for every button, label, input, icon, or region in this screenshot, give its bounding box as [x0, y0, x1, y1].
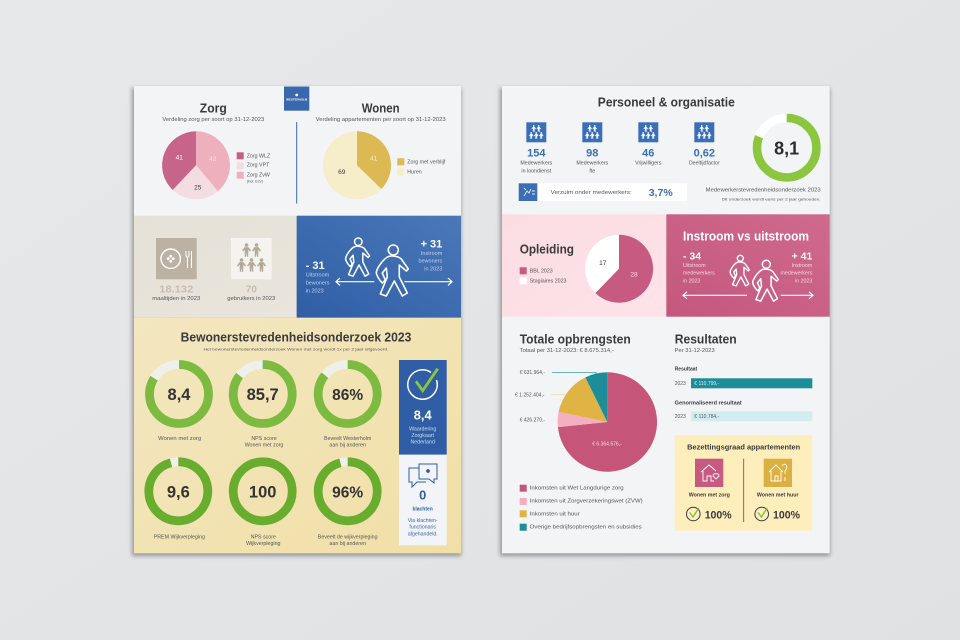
stat: instroom bewoners: [418, 238, 443, 272]
card: bezettingsgraad: Wonen met huur: [757, 492, 799, 498]
ring: beveelt westerholm: Beveelt Westerholm: [324, 436, 372, 442]
stat: instroom bewoners: in 2023: [424, 266, 442, 272]
pie chart: opbrengsten: € 1.252.404,-: [515, 393, 545, 399]
stat: medewerkers fte: [576, 122, 609, 175]
stat: uitstroom medewerkers: [683, 250, 715, 284]
stat: instroom medewerkers: + 41: [792, 250, 812, 262]
panel: resultaten: [675, 331, 812, 531]
caption: medewerkerstevredenheid: Dit onderzoek wordt eens per 2 jaar gehouden.: [722, 196, 821, 201]
ring: medewerkerstevredenheid: [757, 118, 816, 177]
stat: instroom bewoners: Instroom: [421, 251, 443, 257]
bar: verzuim: [519, 183, 687, 201]
card: klachten: klachten: [413, 507, 433, 513]
card: waardering zorgkaart: Waardering: [409, 426, 436, 432]
ring: beveelt wijkverpleging: Beveelt de wijkverpleging: [318, 534, 378, 540]
stat: medewerkers fte: fte: [589, 169, 595, 175]
pie chart: opbrengsten: € 6.364.676,-: [592, 441, 622, 447]
arrow: uitstroom: [683, 292, 747, 299]
pie chart: wonen: [323, 131, 391, 199]
panel: totale opbrengsten: [515, 331, 657, 531]
stat: uitstroom bewoners: [306, 260, 330, 294]
stat: uitstroom medewerkers: Uitstroom: [683, 263, 706, 269]
heading: zorg: Zorg: [200, 100, 227, 115]
legend: zorg: Zorg WLZ: [247, 153, 271, 159]
pie chart: opbrengsten: € 631.964,-: [520, 370, 545, 376]
legend: opleiding: BBL 2023: [530, 268, 553, 274]
heading: personeel: Personeel & organisatie: [598, 95, 735, 110]
right page: [500, 86, 830, 556]
ring: medewerkerstevredenheid: 8,1: [774, 139, 799, 159]
stat: uitstroom bewoners: in 2023: [306, 288, 324, 294]
pie chart: opleiding: 17: [599, 260, 607, 267]
ring: prem wijkverpleging: PREM Wijkverpleging: [154, 534, 205, 540]
ring: wonen met zorg: [150, 364, 208, 442]
ring: nps wijkverpleging: 100: [249, 483, 276, 501]
pie chart: opbrengsten: € 426.270,-: [520, 417, 545, 423]
legend: opbrengsten: Inkomsten uit Wet Langdurige zorg: [530, 485, 624, 491]
stat: instroom medewerkers: [781, 250, 813, 284]
subtitle: wonen: Verdeling appartementen per soort op 31-12-2023: [316, 117, 446, 123]
stat: uitstroom medewerkers: - 34: [683, 250, 701, 262]
stat: instroom medewerkers: in 2023: [795, 278, 812, 284]
subtitle: totale opbrengsten: Totaal per 31-12-2023: € 8.675.314,-: [520, 348, 614, 354]
bar: genormaliseerd resultaat: [675, 400, 812, 421]
panel: personeel en organisatie: [519, 95, 821, 201]
pie chart: opbrengsten: [515, 370, 657, 472]
stat: deeltijdfactor: [689, 122, 720, 166]
ring: nps wonen met zorg: NPS score: [251, 436, 277, 442]
stat: instroom bewoners: bewoners: [418, 259, 443, 265]
caption: medewerkerstevredenheid: [706, 187, 821, 201]
ring: beveelt westerholm: 86%: [332, 387, 363, 404]
value: gebruikers: 70: [246, 284, 257, 295]
legend: wonen: Zorg met verblijf: [407, 159, 446, 165]
value: maaltijden: 18.132: [159, 284, 194, 295]
icon: wonen met huur: [764, 459, 792, 487]
stat: bezetting wonen met zorg: 100%: [705, 510, 732, 522]
bar: resultaat: € 110.799,-: [694, 381, 720, 387]
panel: instroom vs uitstroom: [666, 214, 830, 317]
legend: zorg: Zorg ZvW: [247, 172, 270, 178]
card: waardering zorgkaart: [399, 360, 447, 455]
legend: zorg: Zorg VPT: [247, 163, 270, 169]
ring: beveelt wijkverpleging: 96%: [332, 484, 363, 501]
legend: opbrengsten: Inkomsten uit huur: [530, 511, 580, 517]
legend: zorg: [237, 152, 271, 183]
ring: prem wijkverpleging: [149, 462, 208, 540]
legend: wonen: Huren: [407, 169, 422, 175]
bar: resultaat: Resultaat: [675, 367, 698, 373]
legend: wonen: [397, 158, 446, 175]
stat: uitstroom bewoners: bewoners: [306, 280, 330, 286]
stat: uitstroom medewerkers: medewerkers: [683, 271, 715, 277]
ring: wonen met zorg: Wonen met zorg: [158, 436, 201, 442]
stat: uitstroom bewoners: - 31: [306, 260, 325, 272]
subtitle: bewonerstevredenheid: Het bewonerstevredenheidsonderzoek Wonen met zorg wordt 1x per 2 jaar uitgevoerd.: [204, 346, 388, 351]
legend: opbrengsten: Inkomsten uit Zorgverzekeringswet (ZVW): [530, 498, 643, 504]
card: klachten: functionaris: [409, 525, 436, 531]
card: bezettingsgraad: Wonen met zorg: [689, 492, 730, 498]
arrow: instroom: [781, 292, 813, 299]
subtitle: zorg: Verdeling zorg per soort op 31-12-2023: [162, 117, 264, 123]
ring: prem wijkverpleging: 9,6: [167, 483, 190, 501]
bar: resultaat: [675, 367, 812, 388]
stat: medewerkers fte: Medewerkers: [576, 160, 609, 166]
card: waardering zorgkaart: Nederland: [410, 440, 435, 446]
stat: medewerkers loondienst: 154: [527, 148, 546, 160]
heading: resultaten: Resultaten: [675, 331, 737, 346]
panel: bewonerstevredenheidsonderzoek: [134, 318, 461, 553]
stat: vrijwilligers: Vrijwilligers: [635, 160, 662, 166]
heading: opleiding: Opleiding: [520, 242, 574, 256]
pie chart: wonen: 41: [370, 156, 378, 163]
pie chart: opleiding: 28: [630, 271, 638, 278]
logo: WESTERHOLM: [286, 98, 308, 102]
caption: medewerkerstevredenheid: Medewerkerstevredenheidsonderzoek 2023: [706, 187, 821, 193]
panel: zorg: [162, 100, 271, 199]
panel: instroom uitstroom bewoners: [297, 216, 461, 318]
stat: medewerkers fte: 98: [586, 148, 598, 160]
ring: nps wonen met zorg: [233, 364, 292, 449]
label: gebruikers: gebruikers in 2023: [227, 296, 275, 302]
ring: beveelt westerholm: aan bij anderen: [329, 443, 366, 449]
card: waardering zorgkaart: Zorgkaart: [411, 433, 435, 439]
stat: uitstroom medewerkers: in 2023: [683, 278, 700, 284]
stat: bezetting wonen met huur: 100%: [773, 510, 800, 522]
bar: genormaliseerd resultaat: € 110.784,-: [694, 414, 720, 420]
ring: beveelt wijkverpleging: aan bij anderen: [329, 541, 366, 547]
pie chart: opleiding: [585, 235, 653, 303]
pie chart: zorg: 25: [194, 184, 202, 191]
arrow: instroom: [404, 278, 452, 285]
card: klachten: [399, 455, 447, 545]
icon: walkers: [346, 238, 408, 296]
bar: genormaliseerd resultaat: Genormaliseerd resultaat: [675, 400, 742, 406]
ring: nps wonen met zorg: 85,7: [247, 386, 279, 404]
icon: walkers: [730, 255, 778, 301]
legend: opbrengsten: [520, 485, 643, 531]
pie chart: zorg: 42: [209, 156, 217, 163]
stat: vrijwilligers: [635, 122, 662, 166]
stat: deeltijdfactor: Deeltijdfactor: [689, 160, 720, 166]
icon: gebruikers: [231, 238, 272, 279]
heading: instroom vs uitstroom: Instroom vs uitstroom: [683, 229, 809, 244]
stat: medewerkers loondienst: in loondienst: [521, 169, 552, 175]
legend: opbrengsten: Overige bedrijfsopbrengsten en subsidies: [530, 524, 642, 530]
ring: nps wonen met zorg: Wonen met zorg: [245, 443, 283, 449]
pie chart: zorg: 41: [176, 154, 183, 161]
icon: wonen met zorg: [695, 459, 723, 487]
panel: maaltijden en gebruikers: [134, 216, 297, 318]
stat: instroom medewerkers: medewerkers: [781, 271, 813, 277]
ring: nps wijkverpleging: NPS score: [251, 534, 276, 540]
bar: verzuim: Verzuim onder medewerkers:: [551, 190, 632, 196]
arrow: uitstroom: [336, 278, 374, 285]
ring: beveelt westerholm: [318, 364, 377, 449]
stat: vrijwilligers: 46: [642, 148, 654, 160]
panel: wonen: [316, 100, 446, 199]
stat: instroom medewerkers: Instroom: [792, 263, 813, 269]
subtitle: resultaten: Per 31-12-2023: [675, 348, 715, 354]
card: klachten: afgehandeld.: [408, 531, 438, 537]
pie chart: zorg: [162, 131, 230, 199]
stat: uitstroom bewoners: Uitstroom: [306, 272, 330, 278]
bar: resultaat: 2023: [675, 381, 686, 387]
card: waardering zorgkaart: 8,4: [414, 408, 432, 423]
panel: opleiding: [502, 214, 666, 317]
stat: medewerkers loondienst: Medewerkers: [520, 160, 553, 166]
card: klachten: Via klachten-: [408, 518, 438, 524]
ring: wonen met zorg: 8,4: [168, 386, 191, 404]
stat: instroom bewoners: + 31: [421, 238, 442, 250]
stat: deeltijdfactor: 0,62: [694, 148, 715, 160]
bar: verzuim: 3,7%: [649, 187, 673, 199]
card: klachten: 0: [419, 488, 426, 503]
stat: medewerkers loondienst: [520, 122, 553, 175]
logo: [284, 86, 309, 111]
heading: bewonerstevredenheid: Bewonerstevredenheidsonderzoek 2023: [181, 329, 411, 344]
ring: beveelt wijkverpleging: [318, 462, 378, 547]
icon: plate and cutlery: [156, 238, 197, 279]
label: maaltijden: maaltijden in 2023: [152, 296, 200, 302]
ring: nps wijkverpleging: Wijkverpleging: [246, 541, 281, 547]
card: bezettingsgraad: [675, 435, 812, 531]
legend: opleiding: Stagiaires 2023: [530, 278, 567, 284]
pie chart: wonen: 69: [338, 169, 346, 176]
bar: genormaliseerd resultaat: 2023: [675, 414, 686, 420]
legend: zorg: (incl. ELV): [247, 179, 263, 183]
legend: opleiding: [520, 267, 567, 284]
ring: nps wijkverpleging: [233, 462, 292, 547]
heading: totale opbrengsten: Totale opbrengsten: [520, 331, 631, 346]
card: bezettingsgraad: Bezettingsgraad appartementen: [687, 445, 800, 452]
heading: wonen: Wonen: [362, 100, 400, 115]
left page: [132, 86, 461, 556]
